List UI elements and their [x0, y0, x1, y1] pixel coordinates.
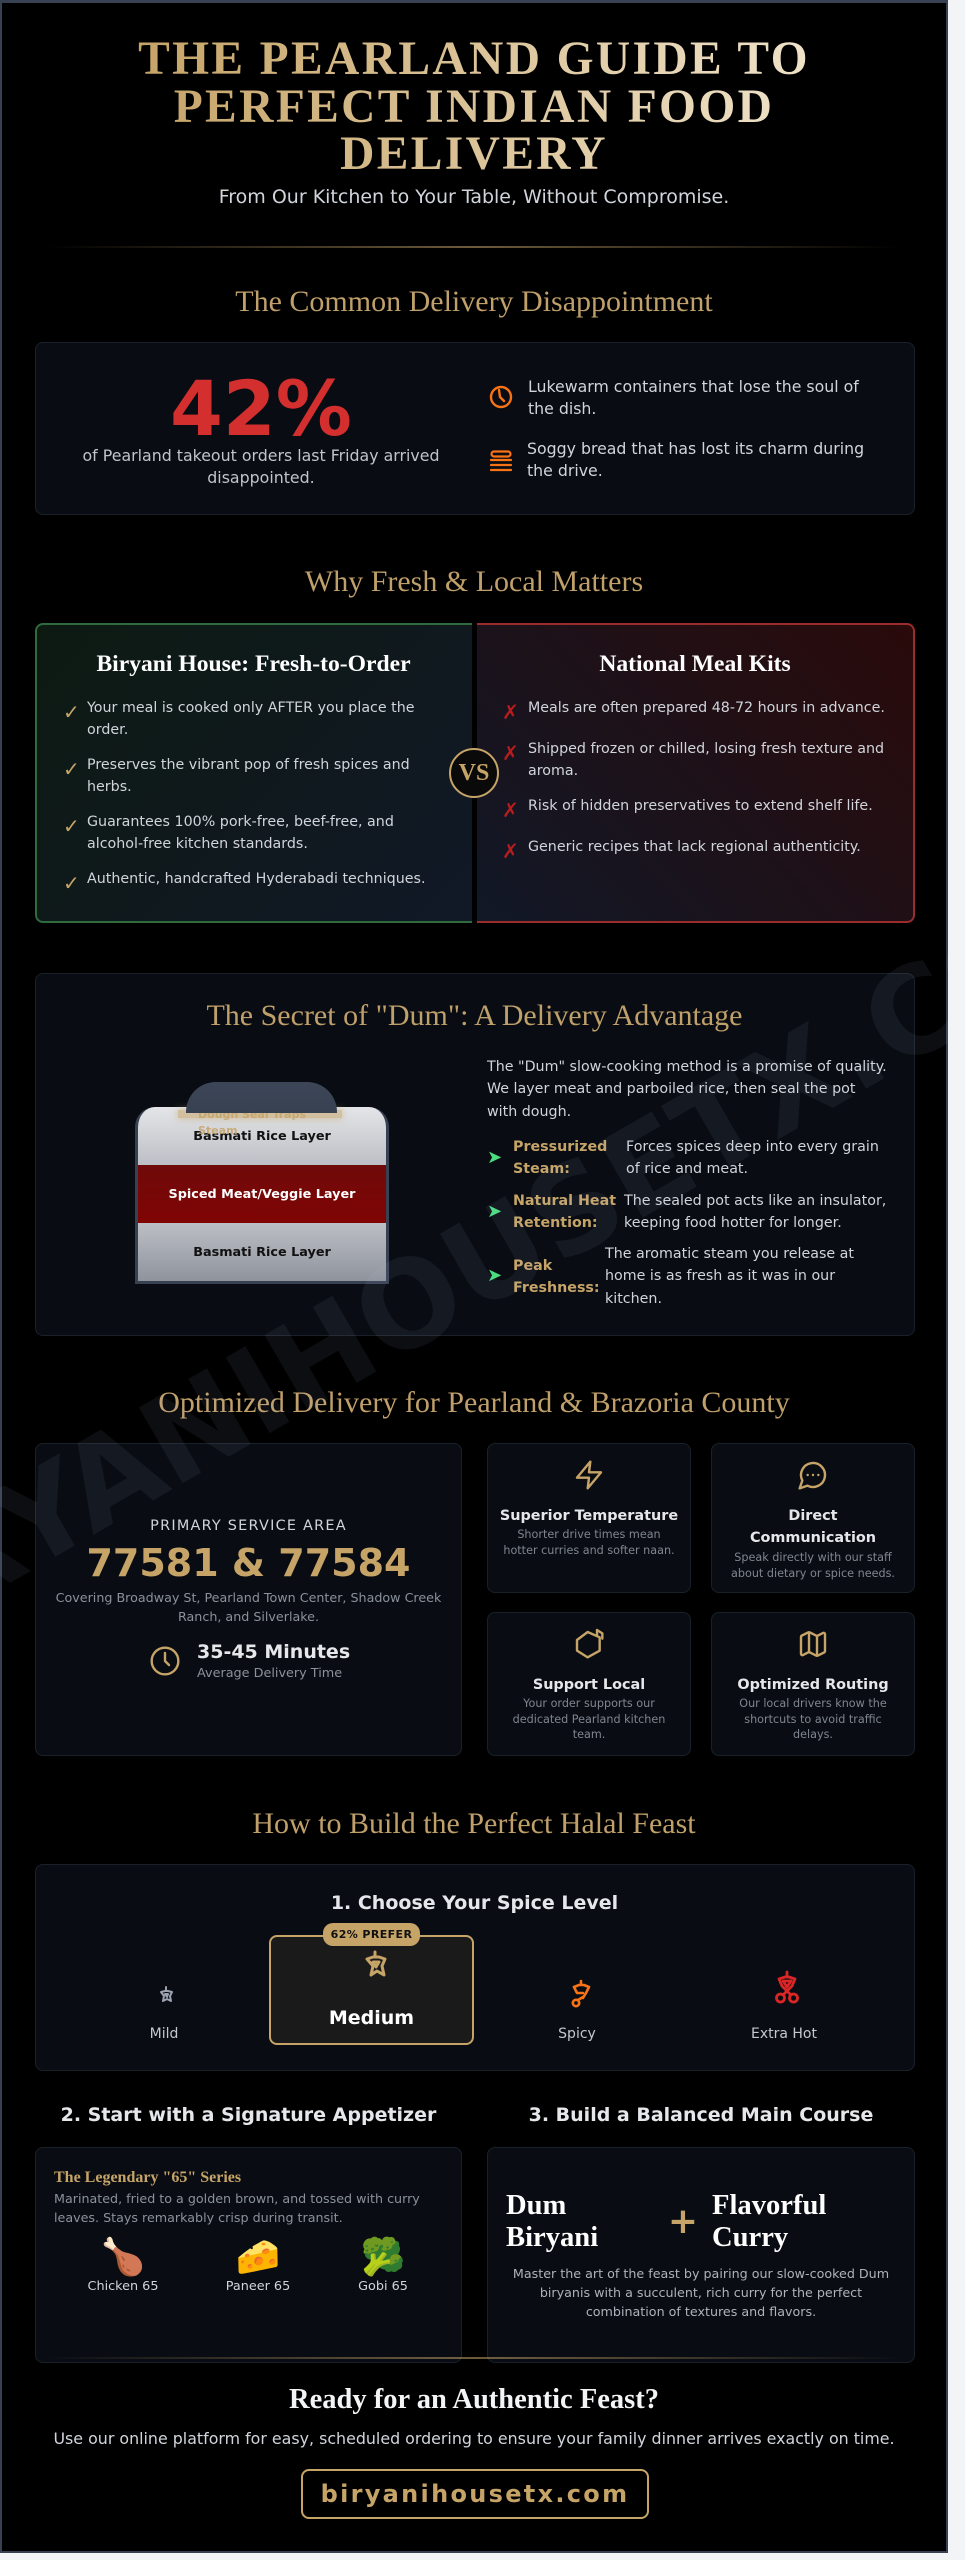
benefit: pressurized steam [487, 1139, 879, 1177]
check list: Guarantees 100% pork-free, beef-free, and [87, 814, 394, 830]
panel: national meal kits column [477, 623, 915, 923]
main: flavorful curry: Curry [712, 2222, 788, 2252]
benefit: natural heat retention: keeping food hotter for longer. [624, 1215, 842, 1231]
icon: clock [490, 386, 512, 408]
cross list: ✗ [502, 798, 519, 822]
card text [739, 1697, 887, 1741]
pairing text: combination of textures and flavors. [586, 2304, 816, 2319]
coverage text: Covering Broadway St, Pearland Town Center, Shadow Creek [56, 1590, 441, 1605]
card text: about dietary or spice needs. [731, 1567, 895, 1580]
complaint: soggy bread: Soggy bread that has lost its charm during [527, 439, 864, 458]
card title [750, 1508, 876, 1546]
cross list [502, 700, 885, 863]
title: DELIVERY [340, 128, 608, 180]
icon: chicken: 🍗 [101, 2237, 145, 2278]
pairing text: Master the art of the feast by pairing our slow-cooked Dum [513, 2266, 889, 2281]
card text: dedicated Pearland kitchen [513, 1713, 665, 1726]
appetizer title: The Legendary "65" Series [54, 2169, 241, 2186]
benefit: natural heat retention: Retention: [513, 1215, 598, 1231]
big stat 42%: 42% [170, 364, 352, 453]
dum intro text: The "Dum" slow-cooking method is a promise of quality. [487, 1059, 887, 1075]
cross list: Risk of hidden preservatives to extend shelf life. [528, 798, 873, 814]
label: Gobi 65 [358, 2279, 408, 2294]
main: dum biryani [506, 2190, 598, 2252]
card text [503, 1528, 675, 1557]
benefit: pressurized steam: Forces spices deep into every grain [626, 1139, 879, 1155]
heading: step 3: 3. Build a Balanced Main Course [529, 2104, 873, 2126]
benefit: peak freshness [487, 1246, 854, 1307]
title: PERFECT INDIAN FOOD [174, 80, 774, 132]
card text: Shorter drive times mean [517, 1528, 661, 1541]
icon: spicy chili [572, 1980, 590, 2008]
pairing text: biryanis with a succulent, rich curry for the perfect [540, 2285, 862, 2300]
label: Chicken 65 [88, 2279, 158, 2294]
icon: local home [576, 1628, 604, 1658]
benefit: natural heat retention: Natural Heat [513, 1193, 616, 1209]
layer: spiced meat: Spiced Meat/Veggie Layer [169, 1187, 355, 1202]
benefit: pressurized steam: Pressurized [513, 1139, 607, 1155]
stat caption: disappointed. [207, 468, 315, 487]
heading: secret of dum: The Secret of "Dum": A Delivery Advantage [206, 999, 742, 1032]
icon: soggy bread stack [490, 450, 512, 472]
card: optimized routing [711, 1612, 915, 1756]
check list: herbs. [87, 779, 132, 795]
panel: appetizers [35, 2147, 462, 2363]
benefit: pressurized steam: Steam: [513, 1161, 570, 1177]
spice: spicy [558, 1980, 596, 2042]
delivery time label: Average Delivery Time [197, 1666, 342, 1681]
benefit: natural heat retention [487, 1193, 886, 1231]
cross list: ✗ [502, 839, 519, 863]
dum intro text: with dough. [487, 1104, 571, 1120]
appetizer: chicken 65 [88, 2236, 158, 2294]
benefit: natural heat retention: ➤ [487, 1201, 502, 1222]
panel: primary service area [35, 1443, 462, 1756]
card text: hotter curries and softer naan. [503, 1544, 675, 1557]
cross list: Shipped frozen or chilled, losing fresh texture and [528, 741, 884, 757]
panel: biryani house column [35, 623, 472, 923]
label: Mild [150, 2026, 178, 2042]
card title: Superior Temperature [500, 1508, 678, 1524]
cross list: aroma. [528, 763, 578, 779]
benefit: peak freshness: home is as fresh as it was in our [605, 1268, 835, 1284]
badge: 62% prefer: 62% PREFER [331, 1928, 412, 1941]
call to action button: biryanihousetx.com [321, 2480, 629, 2508]
main: flavorful curry: Flavorful [712, 2190, 826, 2221]
benefit: peak freshness: Peak [513, 1258, 552, 1274]
heading: common delivery disappointment: The Common Delivery Disappointment [235, 285, 713, 318]
heading: step 2: 2. Start with a Signature Appetizer [61, 2104, 436, 2126]
card: support local [487, 1612, 691, 1756]
cross list: ✗ [502, 741, 519, 765]
dum intro text [486, 1059, 887, 1120]
divider [47, 2357, 901, 2359]
main: flavorful curry [712, 2190, 826, 2252]
benefit: peak freshness: The aromatic steam you release at [605, 1246, 854, 1262]
badge: 62% prefer [323, 1923, 420, 1946]
dough seal band [178, 1110, 342, 1118]
panel: spice level [35, 1864, 915, 2071]
cross list: ✗ [502, 700, 519, 724]
dum intro text: We layer meat and parboiled rice, then seal the pot [487, 1081, 855, 1097]
main: dum biryani: Biryani [506, 2222, 598, 2252]
dough seal label: Dough Seal Traps [198, 1108, 306, 1121]
check list: Preserves the vibrant pop of fresh spices and [87, 757, 410, 773]
dough seal label [198, 1108, 306, 1137]
label: Medium [329, 2007, 414, 2029]
icon: medium chili [365, 1950, 386, 1977]
pot lid [186, 1082, 337, 1113]
benefit: peak freshness: Freshness: [513, 1280, 600, 1296]
check list: alcohol-free kitchen standards. [87, 836, 308, 852]
card title: Support Local [533, 1677, 645, 1693]
benefit: peak freshness: kitchen. [605, 1291, 662, 1307]
appetizer text [54, 2191, 420, 2225]
card: superior temperature [487, 1443, 691, 1593]
check list [63, 700, 425, 895]
divider [47, 246, 901, 248]
icon: chat bubble [798, 1462, 826, 1490]
icon: map [800, 1631, 826, 1657]
call to action heading: Ready for an Authentic Feast? [289, 2384, 659, 2415]
call to action button [301, 2469, 649, 2519]
diagram: layered pot [135, 1082, 389, 1284]
icon: broccoli: 🥦 [361, 2237, 405, 2278]
layer: basmati bottom [138, 1223, 386, 1281]
heading: why fresh and local: Why Fresh & Local Matters [305, 565, 643, 598]
card text: team. [573, 1728, 605, 1741]
spice: mild [150, 1986, 178, 2042]
panel: main course [487, 2147, 915, 2363]
benefit: pressurized steam: of rice and meat. [626, 1161, 748, 1177]
pot body [135, 1107, 389, 1284]
card: direct communication [711, 1443, 915, 1593]
step 1 heading: 1. Choose Your Spice Level [331, 1892, 618, 1914]
column heading: Biryani House: Fresh-to-Order [96, 651, 411, 677]
plus sign: + [668, 2201, 698, 2242]
column heading: National Meal Kits [599, 651, 791, 677]
cross list: Generic recipes that lack regional authenticity. [528, 839, 861, 855]
appetizer: gobi 65 [358, 2236, 408, 2294]
VS badge [449, 748, 499, 798]
stat caption: of Pearland takeout orders last Friday arrived [83, 446, 439, 465]
appetizer: paneer 65 [226, 2237, 290, 2294]
complaint: soggy bread [527, 439, 864, 480]
pairing text [513, 2266, 889, 2319]
check list: order. [87, 722, 128, 738]
dough seal label: Steam [198, 1124, 238, 1137]
call to action text: Use our online platform for easy, scheduled ordering to ensure your family dinner arrives exactly on time. [53, 2429, 895, 2448]
check list: Authentic, handcrafted Hyderabadi techniques. [87, 871, 425, 887]
card text: delays. [793, 1728, 833, 1741]
title: THE PEARLAND GUIDE TO [138, 33, 810, 85]
spice: medium highlighted [269, 1935, 474, 2045]
icon: cheese: 🧀 [236, 2237, 280, 2278]
card title: Optimized Routing [737, 1677, 889, 1693]
spice: extra hot [751, 1970, 817, 2042]
zip codes: 77581 & 77584 [86, 1541, 410, 1585]
icon: delivery clock [150, 1646, 180, 1676]
label: Spicy [558, 2026, 596, 2042]
check list: Your meal is cooked only AFTER you place the [87, 700, 415, 716]
card text [513, 1697, 665, 1741]
delivery time: 35-45 Minutes [197, 1641, 350, 1663]
subtitle: From Our Kitchen to Your Table, Without Compromise. [219, 186, 729, 208]
complaint: soggy bread: the drive. [527, 461, 603, 480]
main: dum biryani: Dum [506, 2190, 566, 2221]
complaint: lukewarm: Lukewarm containers that lose the soul of [528, 377, 859, 396]
coverage text [56, 1590, 442, 1624]
card text: Your order supports our [523, 1697, 655, 1710]
icon: extra hot chili [775, 1970, 799, 2004]
card title: Communication [750, 1530, 876, 1546]
benefit: pressurized steam: ➤ [487, 1147, 502, 1168]
stat caption [83, 446, 439, 487]
VS badge: VS [459, 760, 489, 786]
heading: perfect halal feast: How to Build the Perfect Halal Feast [252, 1807, 696, 1840]
title [0, 36, 948, 178]
benefit: peak freshness: ➤ [487, 1265, 502, 1286]
card title: Direct [788, 1508, 838, 1524]
benefit: natural heat retention: The sealed pot acts like an insulator, [624, 1193, 886, 1209]
check list: ✓ [63, 814, 80, 838]
layer: basmati top [138, 1107, 386, 1165]
layer: basmati bottom: Basmati Rice Layer [193, 1245, 331, 1260]
heading: optimized delivery: Optimized Delivery for Pearland & Brazoria County [158, 1386, 790, 1419]
check list: ✓ [63, 757, 80, 781]
label: Extra Hot [751, 2026, 817, 2042]
panel: dum advantage [35, 973, 915, 1336]
service area label: PRIMARY SERVICE AREA [150, 1518, 347, 1534]
layer: basmati top: Basmati Rice Layer [193, 1129, 331, 1144]
coverage text: Ranch, and Silverlake. [178, 1609, 319, 1624]
check list: ✓ [63, 700, 80, 724]
icon: lightning [576, 1460, 602, 1490]
cross list: Meals are often prepared 48-72 hours in advance. [528, 700, 885, 716]
label: Paneer 65 [226, 2279, 290, 2294]
panel: disappointment stat [35, 342, 915, 515]
card text: Our local drivers know the [739, 1697, 887, 1710]
layer: spiced meat [138, 1165, 386, 1223]
complaint: lukewarm: the dish. [528, 399, 596, 418]
appetizer text: leaves. Stays remarkably crisp during transit. [54, 2210, 343, 2225]
card text [731, 1551, 895, 1580]
complaint: lukewarm [528, 377, 860, 418]
check list: ✓ [63, 871, 80, 895]
card text: Speak directly with our staff [734, 1551, 892, 1564]
card text: shortcuts to avoid traffic [744, 1713, 882, 1726]
icon: mild chili [160, 1986, 173, 2002]
appetizer text: Marinated, fried to a golden brown, and tossed with curry [54, 2191, 420, 2206]
